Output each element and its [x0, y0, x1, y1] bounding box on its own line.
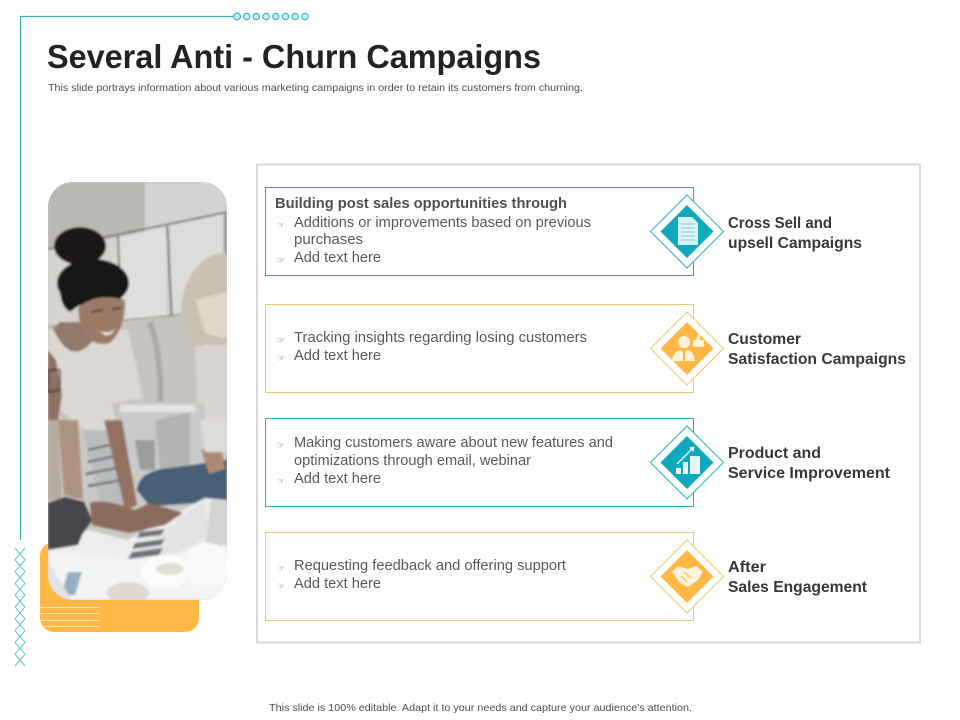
box 2 text: Add text here — [294, 348, 381, 364]
white items — [170, 544, 227, 556]
label 1: upsell Campaigns — [728, 235, 862, 252]
box 4 text: Add text here — [294, 576, 381, 592]
label 2: Customer — [728, 331, 801, 348]
box 3 text: Making customers aware about new features and — [294, 435, 613, 451]
box 1 text: Additions or improvements based on previous — [294, 215, 591, 231]
label 3: Service Improvement — [728, 465, 891, 482]
forearm — [90, 502, 183, 533]
decorative frame line with dots — [20, 13, 308, 540]
orange accent block — [40, 542, 199, 632]
box 4 text: ☞ — [277, 582, 285, 592]
box 2 text: ☞ — [277, 336, 285, 346]
box 3 text — [277, 435, 613, 487]
icon: rising bar chart in teal diamond — [650, 426, 724, 499]
content panel — [257, 164, 920, 642]
dark sleeve — [48, 497, 92, 550]
photo: colleagues around a table — [48, 182, 231, 604]
title: Several Anti - Churn Campaigns — [47, 38, 541, 75]
label 2 — [728, 331, 906, 368]
label 4: After — [728, 559, 766, 576]
label 4: Sales Engagement — [728, 579, 868, 596]
box 2 text — [277, 330, 587, 364]
label 1: Cross Sell and — [728, 215, 832, 232]
row 3: product and service improvement — [266, 418, 891, 506]
label 2: Satisfaction Campaigns — [728, 351, 906, 368]
box 1 text: Add text here — [294, 250, 381, 266]
row 4: after sales engagement — [266, 532, 868, 620]
box 2 text: Tracking insights regarding losing customers — [294, 330, 587, 346]
box 1 text: Building post sales opportunities through — [275, 196, 567, 212]
arm — [104, 420, 137, 510]
text box 2 — [266, 304, 694, 392]
box 2 text: ☞ — [277, 354, 285, 364]
label 3 — [728, 445, 891, 482]
icon: handshake in orange diamond — [650, 540, 724, 613]
hair — [54, 227, 106, 265]
face — [78, 297, 125, 344]
box 3 text: Add text here — [294, 471, 381, 487]
box 1 text — [275, 196, 591, 266]
table and chair background — [120, 403, 205, 473]
label 3: Product and — [728, 445, 821, 462]
text box 4 — [266, 532, 694, 620]
box 3 text: ☞ — [277, 441, 285, 451]
text box 1 — [266, 188, 694, 276]
label 4 — [728, 559, 868, 596]
text box 3 — [266, 418, 694, 506]
box 3 text: ☞ — [277, 477, 285, 487]
box 1 text: ☞ — [277, 256, 285, 266]
box 3 text: optimizations through email, webinar — [294, 453, 531, 469]
jeans — [137, 460, 227, 506]
icon: person with thumbs up in orange diamond — [650, 312, 724, 385]
box 4 text: ☞ — [277, 564, 285, 574]
row 1: cross sell and upsell campaigns — [266, 188, 862, 276]
icon: document in teal diamond — [650, 195, 724, 268]
box 4 text: Requesting feedback and offering support — [294, 558, 566, 574]
subtitle: This slide portrays information about various marketing campaigns in order to retain its customers from churning. — [48, 83, 583, 94]
striped skirt — [83, 430, 125, 508]
row 2: customer satisfaction campaigns — [266, 304, 906, 392]
blonde woman — [195, 345, 227, 420]
left woman with glasses — [48, 350, 62, 425]
label 1 — [728, 215, 862, 252]
box 4 text — [277, 558, 566, 592]
smiling woman shirt — [48, 327, 143, 430]
decorative cross pattern — [15, 548, 25, 666]
table surface — [48, 496, 225, 560]
footer note: This slide is 100% editable. Adapt it to your needs and capture your audience's attention. — [269, 703, 692, 714]
box 1 text: ☞ — [277, 221, 285, 231]
box 1 text: purchases — [294, 232, 363, 248]
